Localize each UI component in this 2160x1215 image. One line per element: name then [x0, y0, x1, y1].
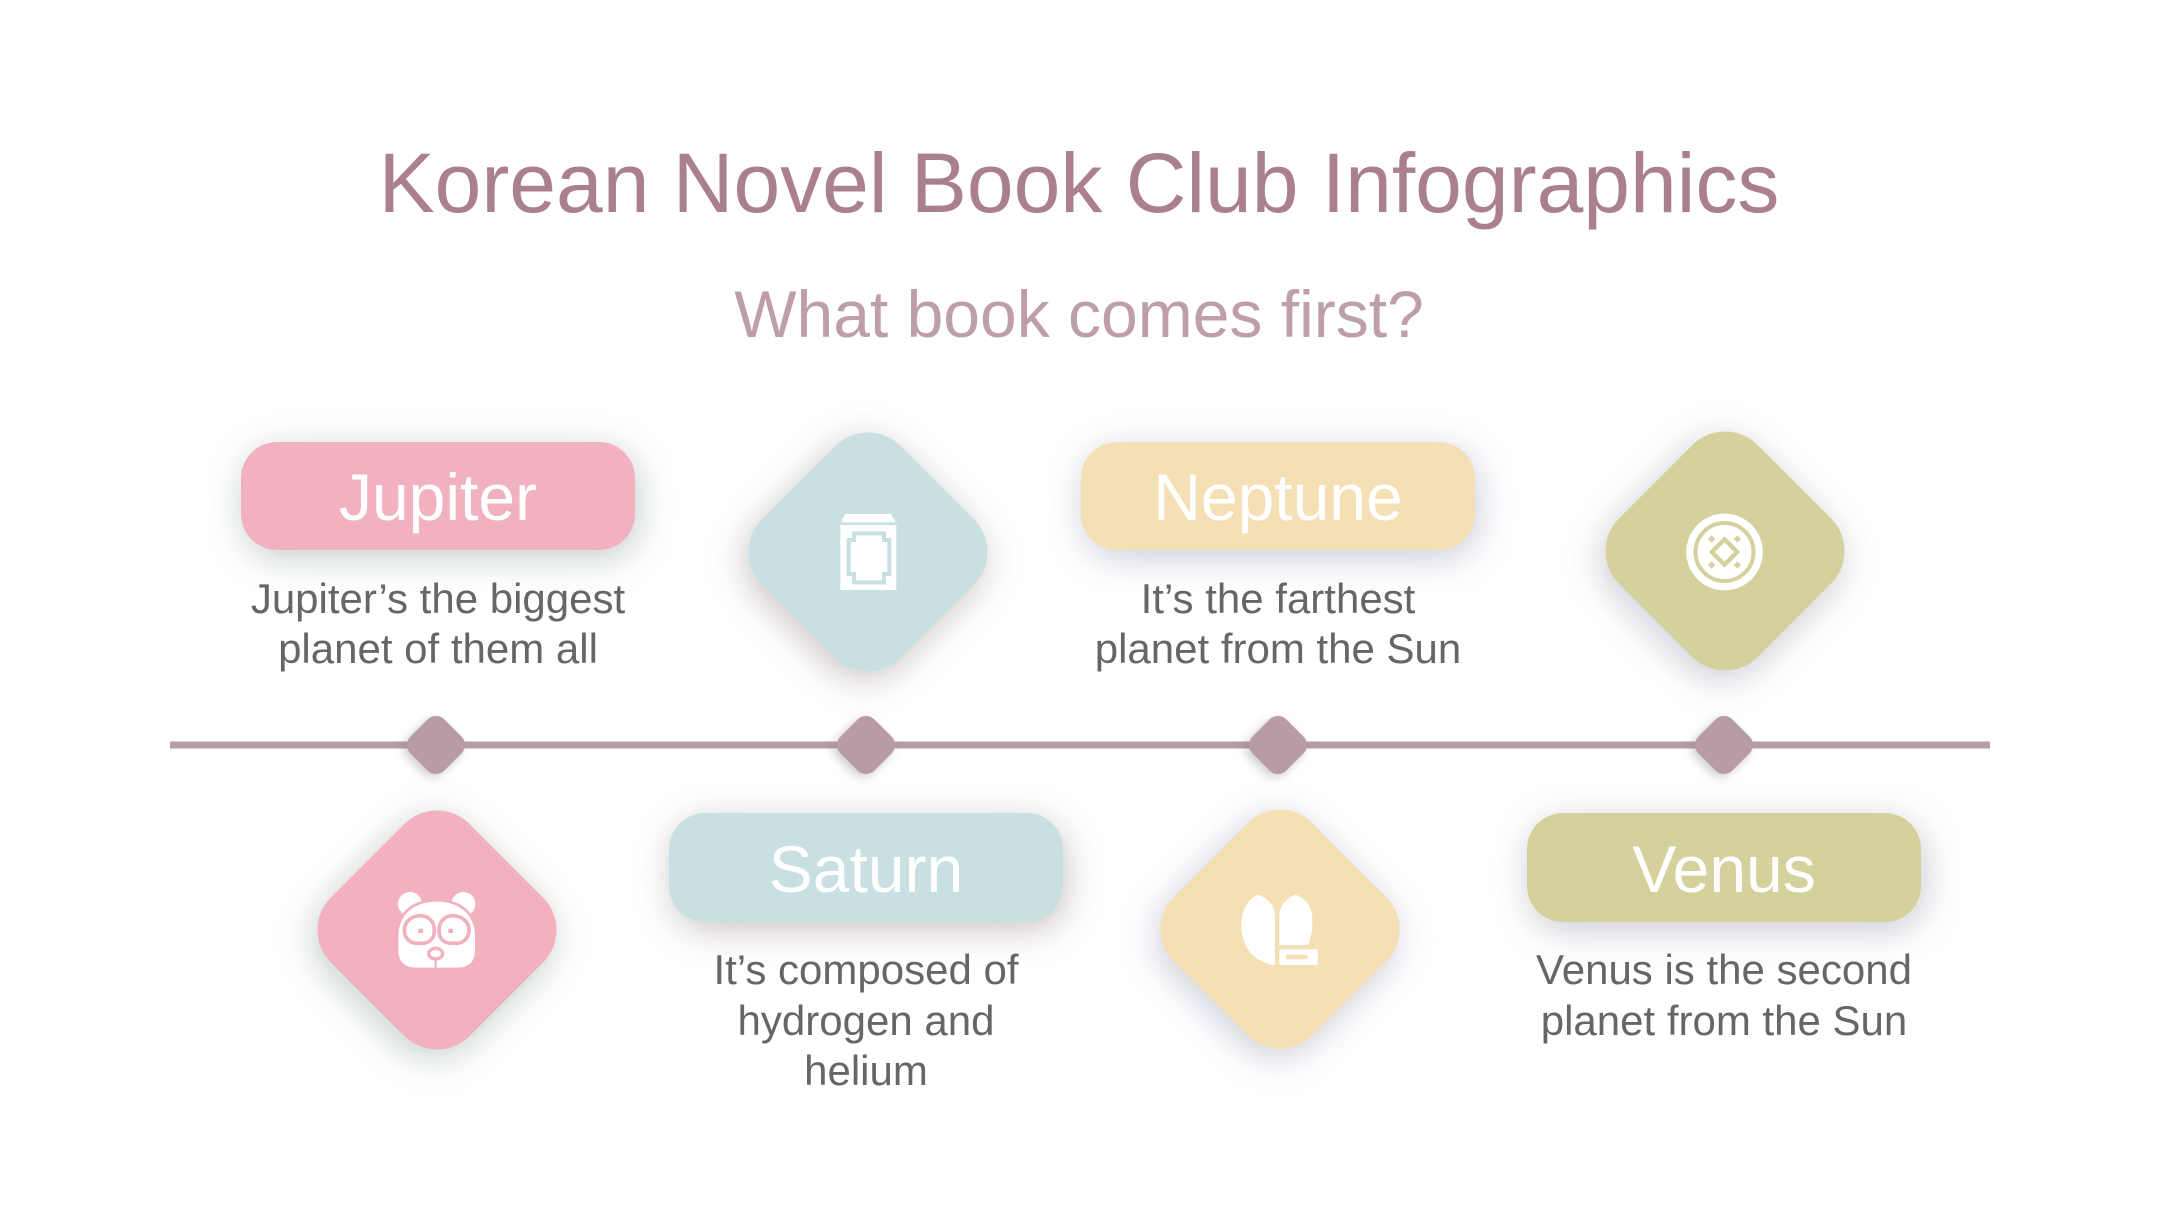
icon badge: book box	[729, 413, 1007, 691]
Venus description: Venus is the second	[1536, 946, 1912, 993]
Jupiter label pill	[241, 442, 635, 550]
Jupiter description: planet of them all	[278, 625, 598, 672]
icon: leaves	[1241, 895, 1318, 965]
timeline marker: Venus	[1690, 711, 1758, 779]
icon badge: coin	[1586, 412, 1864, 690]
icon: coin	[1686, 514, 1763, 590]
subtitle: What book comes first?	[734, 277, 1424, 351]
Saturn description: hydrogen and	[738, 997, 994, 1044]
Saturn description: helium	[804, 1047, 928, 1094]
Saturn description: It’s composed of	[713, 946, 1019, 993]
panel: Neptune	[1081, 442, 1475, 672]
Neptune label pill	[1081, 442, 1475, 550]
icon: panda	[396, 892, 478, 970]
timeline line	[170, 742, 1990, 748]
panel: Jupiter	[241, 442, 635, 672]
Venus heading: Venus	[1632, 832, 1816, 906]
Neptune description: planet from the Sun	[1095, 625, 1461, 672]
icon: book box	[840, 514, 896, 590]
icon badge: panda	[298, 791, 576, 1069]
Venus description: planet from the Sun	[1541, 997, 1907, 1044]
panel: Saturn	[669, 813, 1063, 1094]
Jupiter heading: Jupiter	[339, 460, 537, 534]
timeline marker: Neptune	[1244, 711, 1312, 779]
Jupiter description: Jupiter’s the biggest	[251, 575, 626, 622]
Neptune description: It’s the farthest	[1141, 575, 1416, 622]
Saturn label pill	[669, 813, 1063, 922]
title: Korean Novel Book Club Infographics	[379, 136, 1779, 230]
timeline marker: Saturn	[832, 711, 900, 779]
Venus label pill	[1527, 813, 1921, 922]
icon badge: leaves	[1141, 790, 1419, 1068]
Neptune heading: Neptune	[1153, 460, 1403, 534]
panel: Venus	[1527, 813, 1921, 1044]
timeline marker: Jupiter	[402, 711, 470, 779]
Saturn heading: Saturn	[769, 832, 963, 906]
